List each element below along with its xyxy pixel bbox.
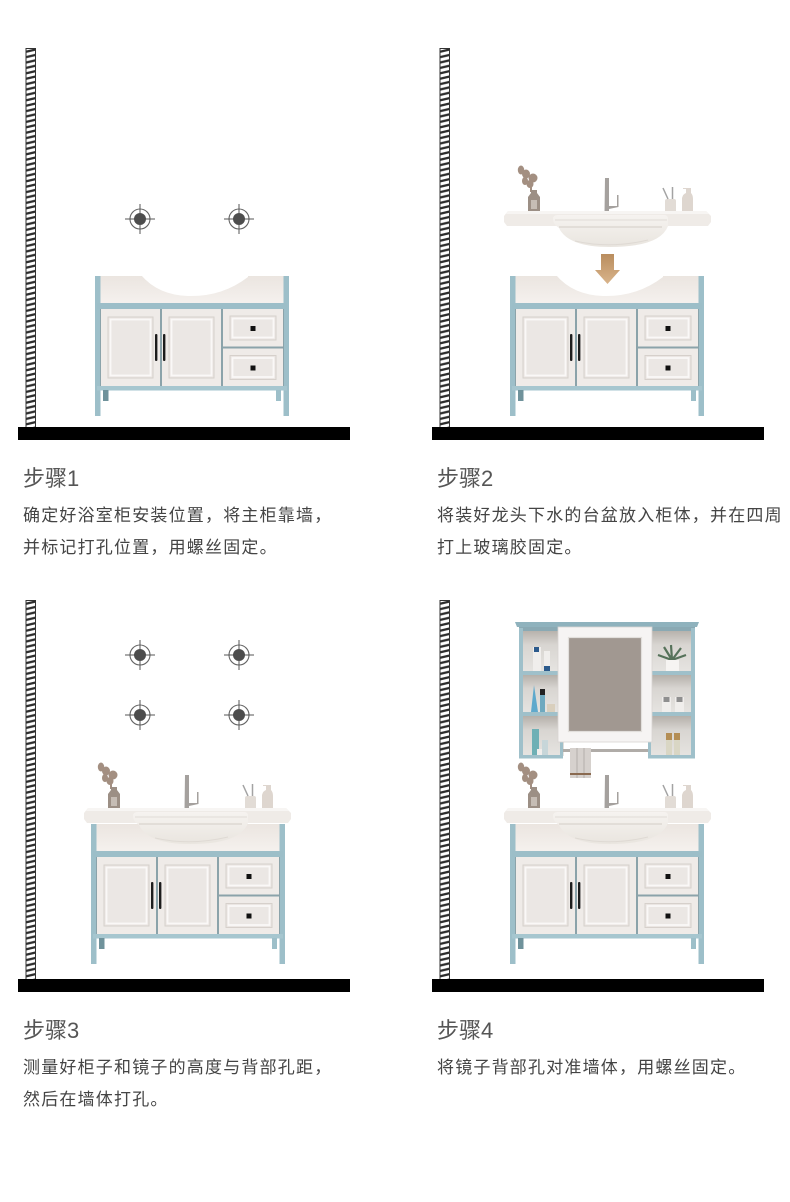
step 1 heading: 步骤1	[23, 466, 79, 491]
step 1 description: 确定好浴室柜安装位置，将主柜靠墙，	[23, 506, 332, 525]
towel	[570, 748, 591, 778]
floor slab	[432, 427, 764, 440]
mirror cabinet	[515, 622, 699, 778]
step 1 description: 并标记打孔位置，用螺丝固定。	[23, 538, 278, 557]
floor slab	[18, 979, 350, 992]
step 2 description	[437, 506, 783, 557]
step 4 description: 将镜子背部孔对准墙体，用螺丝固定。	[437, 1058, 746, 1077]
wall hatching	[440, 48, 450, 428]
step 3 description: 然后在墙体打孔。	[23, 1090, 169, 1109]
basin with faucet and accessories	[84, 762, 291, 844]
step 2 description: 将装好龙头下水的台盆放入柜体，并在四周	[437, 506, 783, 525]
basin with faucet and accessories	[504, 762, 711, 844]
wall hatching	[26, 48, 36, 428]
panel: step 2	[432, 48, 783, 557]
step 2 heading: 步骤2	[437, 466, 493, 491]
drill marks	[125, 640, 254, 730]
assembled cabinet with basin	[510, 824, 704, 964]
panel: step 4	[432, 600, 764, 1077]
step 2 description: 打上玻璃胶固定。	[437, 538, 583, 557]
drill marks	[125, 204, 254, 234]
cabinet without basin	[95, 274, 289, 416]
step 3 heading: 步骤3	[23, 1018, 79, 1043]
wall hatching	[26, 600, 36, 980]
step 4 heading: 步骤4	[437, 1018, 493, 1043]
step 3 description	[23, 1058, 332, 1109]
assembled cabinet with basin	[91, 824, 285, 964]
shelf items	[531, 645, 686, 755]
step 1 description	[23, 506, 332, 557]
arrow: basin goes down	[595, 254, 620, 284]
mirror door	[558, 627, 652, 742]
floor slab	[432, 979, 764, 992]
step 3 description: 测量好柜子和镜子的高度与背部孔距，	[23, 1058, 332, 1077]
panel: step 3	[18, 600, 350, 1109]
floor slab	[18, 427, 350, 440]
cabinet without basin	[510, 274, 704, 416]
basin with faucet and accessories	[504, 166, 711, 247]
panel: step 1	[18, 48, 350, 557]
wall hatching	[440, 600, 450, 980]
